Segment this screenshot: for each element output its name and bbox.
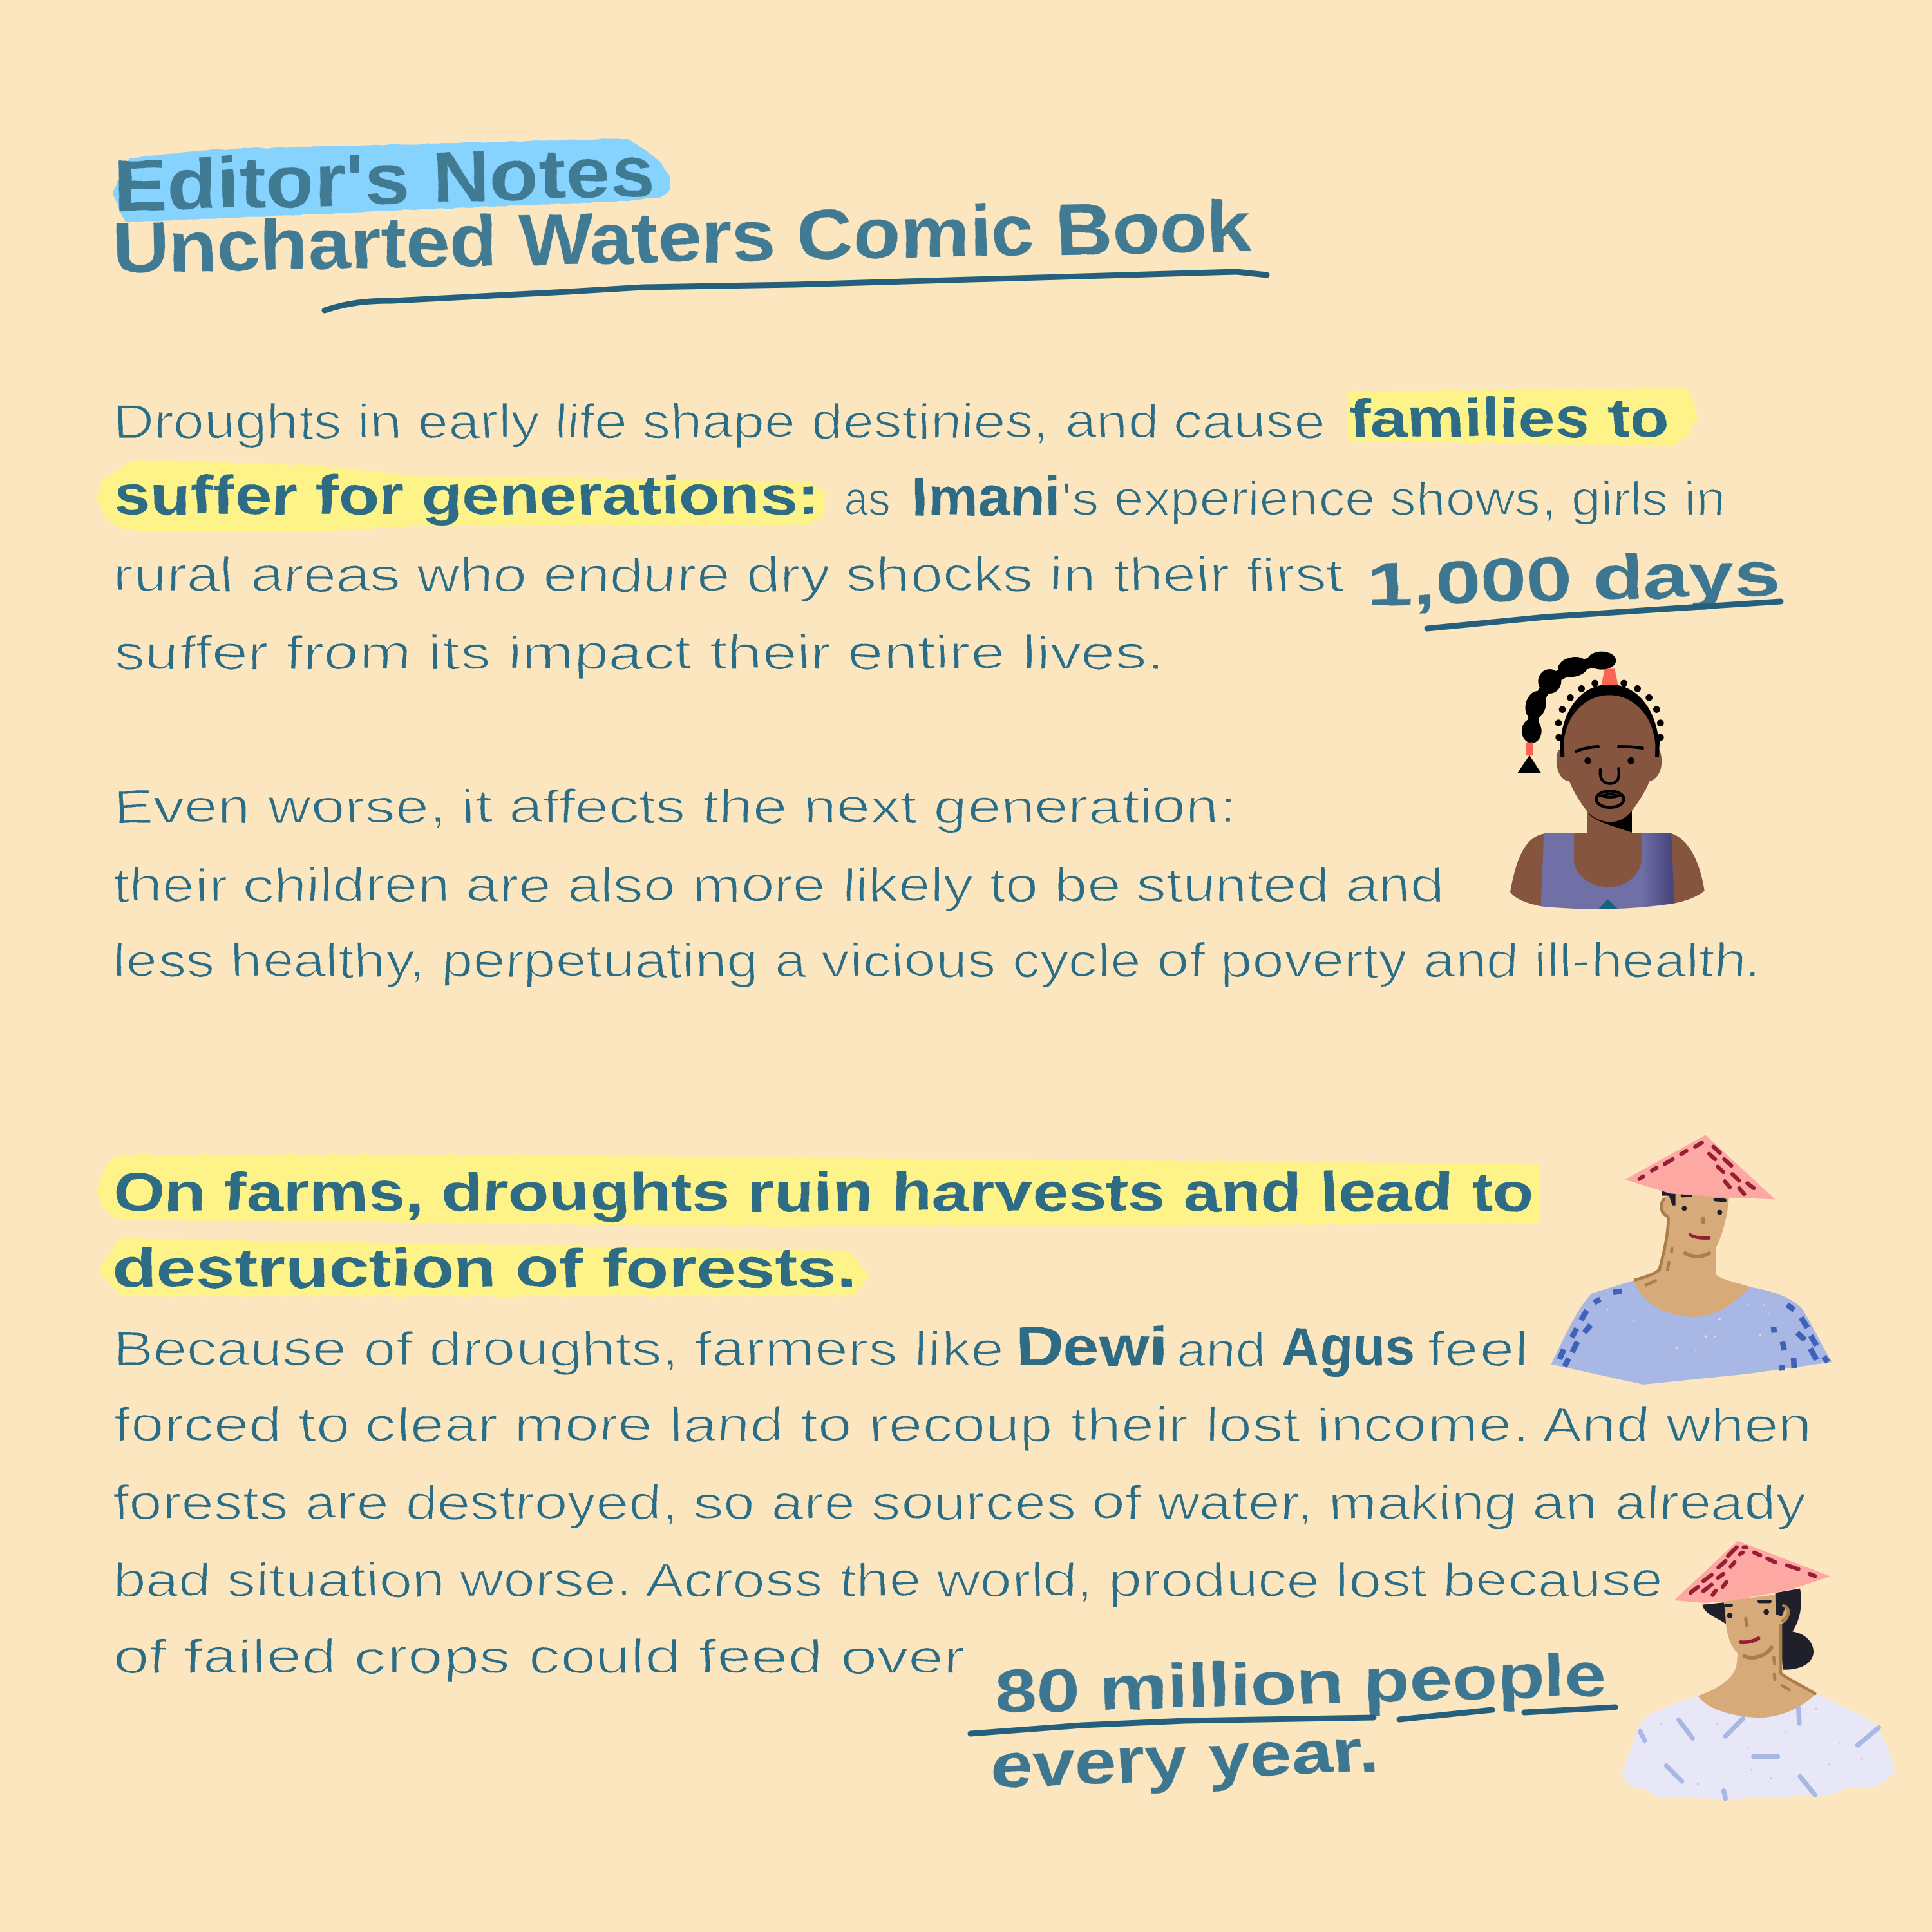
panel: farms and forests: Because of droughts, farmers like <box>113 1322 1004 1376</box>
panel: farms and forests: feel <box>1427 1322 1528 1376</box>
panel: farms and forests: bad situation worse. Across the world, produce lost because <box>113 1553 1663 1607</box>
panel: farms and forests: forced to clear more land to recoup their lost income. And when <box>113 1398 1812 1452</box>
callout: 80 million people every year: 80 million people <box>994 1640 1607 1727</box>
callout: 80 million people every year: every year. <box>989 1716 1380 1801</box>
panel: farms and forests <box>101 1159 1812 1801</box>
heading: uncharted waters comic book: Uncharted Waters Comic Book <box>112 186 1251 289</box>
panel: droughts in early life: Imani <box>912 466 1060 527</box>
panel: droughts in early life: as <box>844 472 890 526</box>
panel: droughts in early life: rural areas who endure dry shocks in their first <box>113 548 1343 601</box>
heading: editor's notes: Editor's Notes <box>113 131 656 227</box>
panel: droughts in early life: families to <box>1349 388 1669 448</box>
panel: droughts in early life: suffer from its impact their entire lives. <box>113 626 1164 679</box>
panel: farms and forests: On farms, droughts ruin harvests and lead to <box>113 1162 1534 1222</box>
panel: farms and forests: destruction of forests. <box>113 1238 857 1298</box>
panel: droughts in early life: 's experience shows, girls in <box>1062 472 1725 526</box>
panel: droughts in early life: suffer for generations: <box>113 465 819 526</box>
icon: farmer Dewi <box>1622 1541 1895 1799</box>
panel: farms and forests: Dewi <box>1016 1316 1168 1377</box>
panel: droughts in early life: Droughts in early life shape destinies, and cause <box>113 395 1325 448</box>
panel: farms and forests: forests are destroyed, so are sources of water, making an already <box>113 1476 1805 1530</box>
panel: farms and forests: Agus <box>1282 1316 1415 1377</box>
panel: droughts in early life: less healthy, perpetuating a vicious cycle of poverty and ill-health. <box>113 934 1762 987</box>
panel: droughts in early life: their children are also more likely to be stunted and <box>113 858 1444 912</box>
icon: farmer Agus <box>1551 1135 1832 1385</box>
panel: farms and forests: of failed crops could feed over <box>113 1630 965 1683</box>
icon: girl Imani <box>1510 652 1705 909</box>
panel: farms and forests: and <box>1177 1323 1265 1377</box>
panel: droughts in early life: Even worse, it affects the next generation: <box>113 780 1236 833</box>
callout: 1,000 days: 1,000 days <box>1367 539 1780 619</box>
panel: droughts in early life <box>101 388 1781 987</box>
callout: 1,000 days <box>1367 539 1781 629</box>
callout: 80 million people every year <box>971 1640 1615 1801</box>
